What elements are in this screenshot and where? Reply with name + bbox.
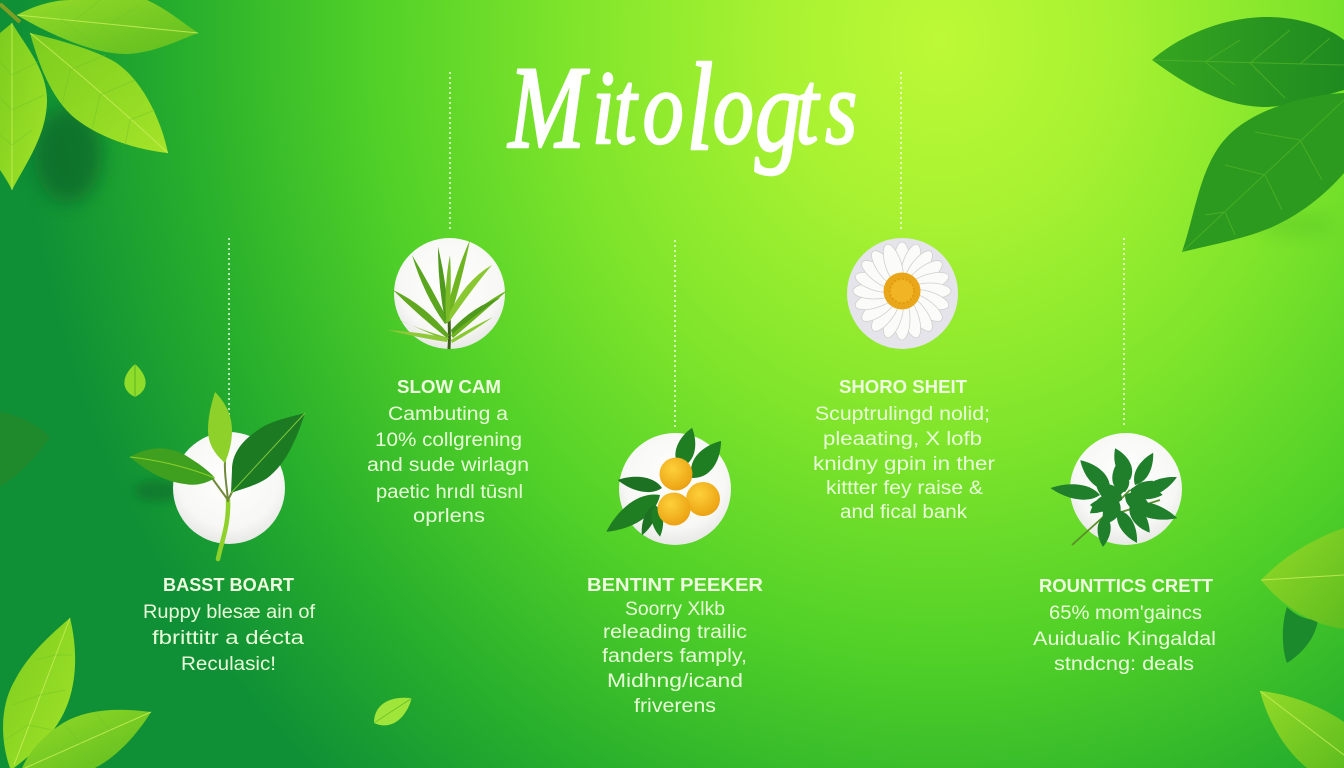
title: g [755, 45, 801, 176]
item 3: heading and text: fanders famply, [602, 646, 747, 667]
item 1: heading and text: fbrittitr a décta [152, 628, 305, 649]
bottom-left leaves [3, 618, 151, 768]
title [507, 39, 857, 177]
item 1: heading and text: Ruppy blesæ ain of [143, 602, 316, 623]
small floating leaf bottom [368, 689, 418, 732]
item 3: heading and text: friverens [634, 696, 716, 717]
title: M [507, 42, 589, 173]
item 3: heading and text [587, 575, 763, 717]
item 2: heading and text: and sude wirlagn [367, 455, 529, 476]
title: o [643, 50, 684, 166]
item 4: heading and text: SHORO SHEIT [839, 377, 967, 397]
item 5: heading and text [1033, 576, 1216, 675]
item 2: grass icon [380, 238, 508, 349]
item 3: heading and text: Midhng/icand [607, 671, 743, 692]
title: s [825, 50, 857, 166]
item 1: heading and text [143, 575, 316, 675]
title: t [796, 50, 821, 166]
title: t [614, 50, 639, 166]
left edge dark leaf [0, 412, 50, 487]
item 5: heading and text: ROUNTTICS CRETT [1039, 576, 1213, 596]
item 5: heading and text: stndcng: deals [1054, 654, 1194, 675]
item 3: heading and text: BENTINT PEEKER [587, 575, 763, 595]
item 4: heading and text: kittter fey raise & [826, 478, 983, 499]
item 1: heading and text: BASST BOART [163, 575, 294, 595]
top-left leaf cluster [0, 0, 198, 203]
item 2: heading and text: 10% collgrening [375, 430, 522, 451]
item 2: heading and text: SLOW CAM [397, 377, 501, 397]
right edge leaves [1260, 528, 1344, 768]
item 5: heading and text: Auidualic Kingaldal [1033, 629, 1216, 650]
item 1: heading and text: Reculasic! [181, 654, 276, 675]
item 5: herb icon [1049, 433, 1182, 547]
item 2: heading and text: Cambuting a [388, 404, 508, 425]
item 4: daisy icon [847, 238, 958, 349]
item 3: citrus icon [601, 425, 731, 545]
item 2: heading and text: paetic hrıdl tūsnl [376, 482, 523, 503]
top-right leaf cluster [1152, 17, 1344, 252]
item 1: seedling icon [130, 392, 305, 559]
item 4: heading and text: Scuptrulingd nolid; [815, 404, 990, 425]
item 5: heading and text: 65% mom'gaincs [1049, 603, 1202, 624]
title: l [686, 39, 713, 177]
item 4: heading and text: knidny gpin in ther [813, 454, 996, 475]
connector dashed lines [229, 72, 1124, 428]
small floating leaf left [124, 364, 146, 397]
item 2: heading and text [367, 377, 529, 527]
item 4: heading and text: and fical bank [840, 502, 968, 523]
title: i [592, 50, 615, 166]
item 4: heading and text: pleaating, X lofb [823, 429, 982, 450]
item 4: heading and text [813, 377, 996, 523]
item 2: heading and text: oprlens [413, 506, 485, 527]
item 3: heading and text: releading trailic [603, 622, 747, 643]
title: o [713, 50, 754, 166]
item 3: heading and text: Soorry Xlkb [625, 599, 725, 620]
